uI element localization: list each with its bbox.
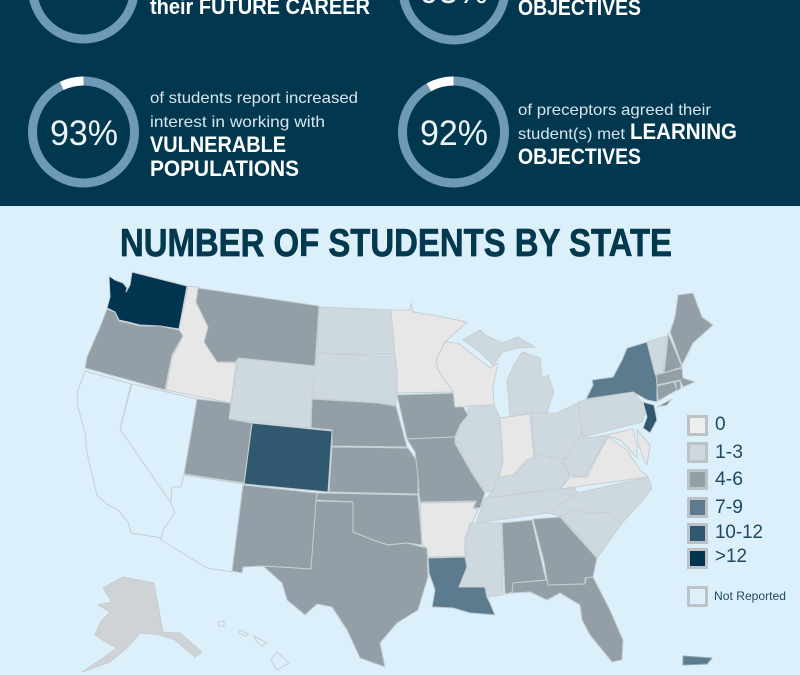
donut ring 92%	[402, 81, 504, 183]
Idaho	[166, 286, 236, 403]
Arizona	[161, 475, 243, 572]
text: preceptors: of preceptors agreed their	[518, 102, 712, 119]
Connecticut	[657, 382, 677, 401]
Virginia	[560, 437, 648, 489]
Arkansas	[420, 502, 478, 557]
North Carolina	[548, 477, 652, 523]
Alabama	[502, 520, 546, 594]
Rhode Island	[675, 381, 681, 391]
New Jersey	[643, 402, 657, 433]
percent 93: 93%	[50, 114, 118, 153]
donut ring 93%	[32, 81, 134, 183]
legend item >12	[688, 546, 747, 568]
Massachusetts	[656, 368, 695, 387]
South Carolina	[560, 510, 622, 557]
stat: future career (cropped)	[32, 0, 370, 39]
legend item 0: 0	[715, 414, 726, 435]
legend item 1-3: 1-3	[715, 442, 743, 463]
text: vulnerable populations: POPULATIONS	[150, 156, 299, 181]
legend item not reported: Not Reported	[714, 589, 786, 603]
Illinois	[455, 405, 503, 492]
Iowa	[397, 393, 468, 439]
chart: choropleth map of US states	[77, 272, 713, 672]
Washington	[107, 272, 187, 329]
Utah	[184, 399, 252, 483]
legend item 10-12	[688, 522, 763, 543]
Michigan lower peninsula	[507, 352, 554, 415]
Texas	[263, 501, 428, 667]
Vermont	[647, 336, 667, 374]
percent 92: 92%	[420, 114, 488, 153]
text: vulnerable populations: interest in working with	[150, 114, 325, 131]
Missouri	[407, 437, 485, 508]
Delaware and Delmarva peninsula	[637, 430, 650, 465]
Hawaii	[218, 621, 289, 670]
Colorado	[244, 423, 332, 492]
legend item 0	[688, 414, 726, 435]
Long Island	[657, 399, 672, 407]
Nebraska	[311, 399, 407, 447]
Indiana	[499, 414, 534, 477]
Wyoming	[229, 358, 314, 428]
Kentucky	[487, 455, 570, 498]
legend	[688, 414, 786, 606]
Tennessee	[476, 488, 577, 523]
text: vulnerable populations: of students report increased	[150, 90, 358, 107]
stat: learning objectives (cropped)	[403, 0, 641, 40]
legend item >12: >12	[715, 546, 747, 567]
legend item 7-9	[688, 497, 743, 518]
Georgia	[533, 517, 597, 585]
text: preceptors: OBJECTIVES	[518, 144, 641, 169]
stat: 93% vulnerable populations	[32, 81, 358, 183]
Pennsylvania	[578, 392, 647, 437]
Oregon	[85, 309, 183, 390]
legend item not reported	[688, 588, 786, 606]
West Virginia	[563, 433, 608, 477]
Kansas	[329, 447, 418, 494]
Oklahoma	[316, 493, 422, 545]
South Dakota	[313, 353, 397, 405]
New York	[586, 342, 657, 402]
Florida	[512, 577, 623, 662]
legend item 10-12: 10-12	[715, 522, 763, 543]
Mississippi	[459, 523, 503, 597]
text: vulnerable populations	[150, 90, 358, 181]
Minnesota	[391, 303, 467, 393]
title: NUMBER OF STUDENTS BY STATE	[120, 222, 672, 265]
California	[77, 371, 175, 538]
legend item 4-6: 4-6	[715, 469, 743, 490]
stat: 92% learning objectives	[402, 81, 737, 183]
New Hampshire	[664, 333, 682, 373]
text: preceptors	[518, 102, 737, 169]
Maine	[670, 293, 713, 365]
North Dakota	[317, 307, 395, 355]
legend item 4-6	[688, 469, 743, 490]
legend item 7-9: 7-9	[715, 497, 743, 518]
text: preceptors: LEARNING	[630, 119, 737, 144]
Puerto Rico	[683, 656, 712, 665]
Louisiana	[428, 557, 495, 615]
Michigan upper peninsula	[463, 330, 535, 365]
text: preceptors: student(s) met	[518, 126, 626, 143]
Alaska	[82, 577, 202, 672]
Montana	[196, 288, 319, 366]
panel: outcome statistics	[0, 0, 800, 206]
Wisconsin	[436, 342, 498, 407]
Maryland	[597, 429, 637, 458]
Nevada	[120, 384, 197, 503]
Ohio	[531, 403, 583, 460]
legend item 1-3	[688, 442, 743, 463]
text: vulnerable populations: VULNERABLE	[150, 132, 286, 157]
New Mexico	[232, 485, 317, 573]
